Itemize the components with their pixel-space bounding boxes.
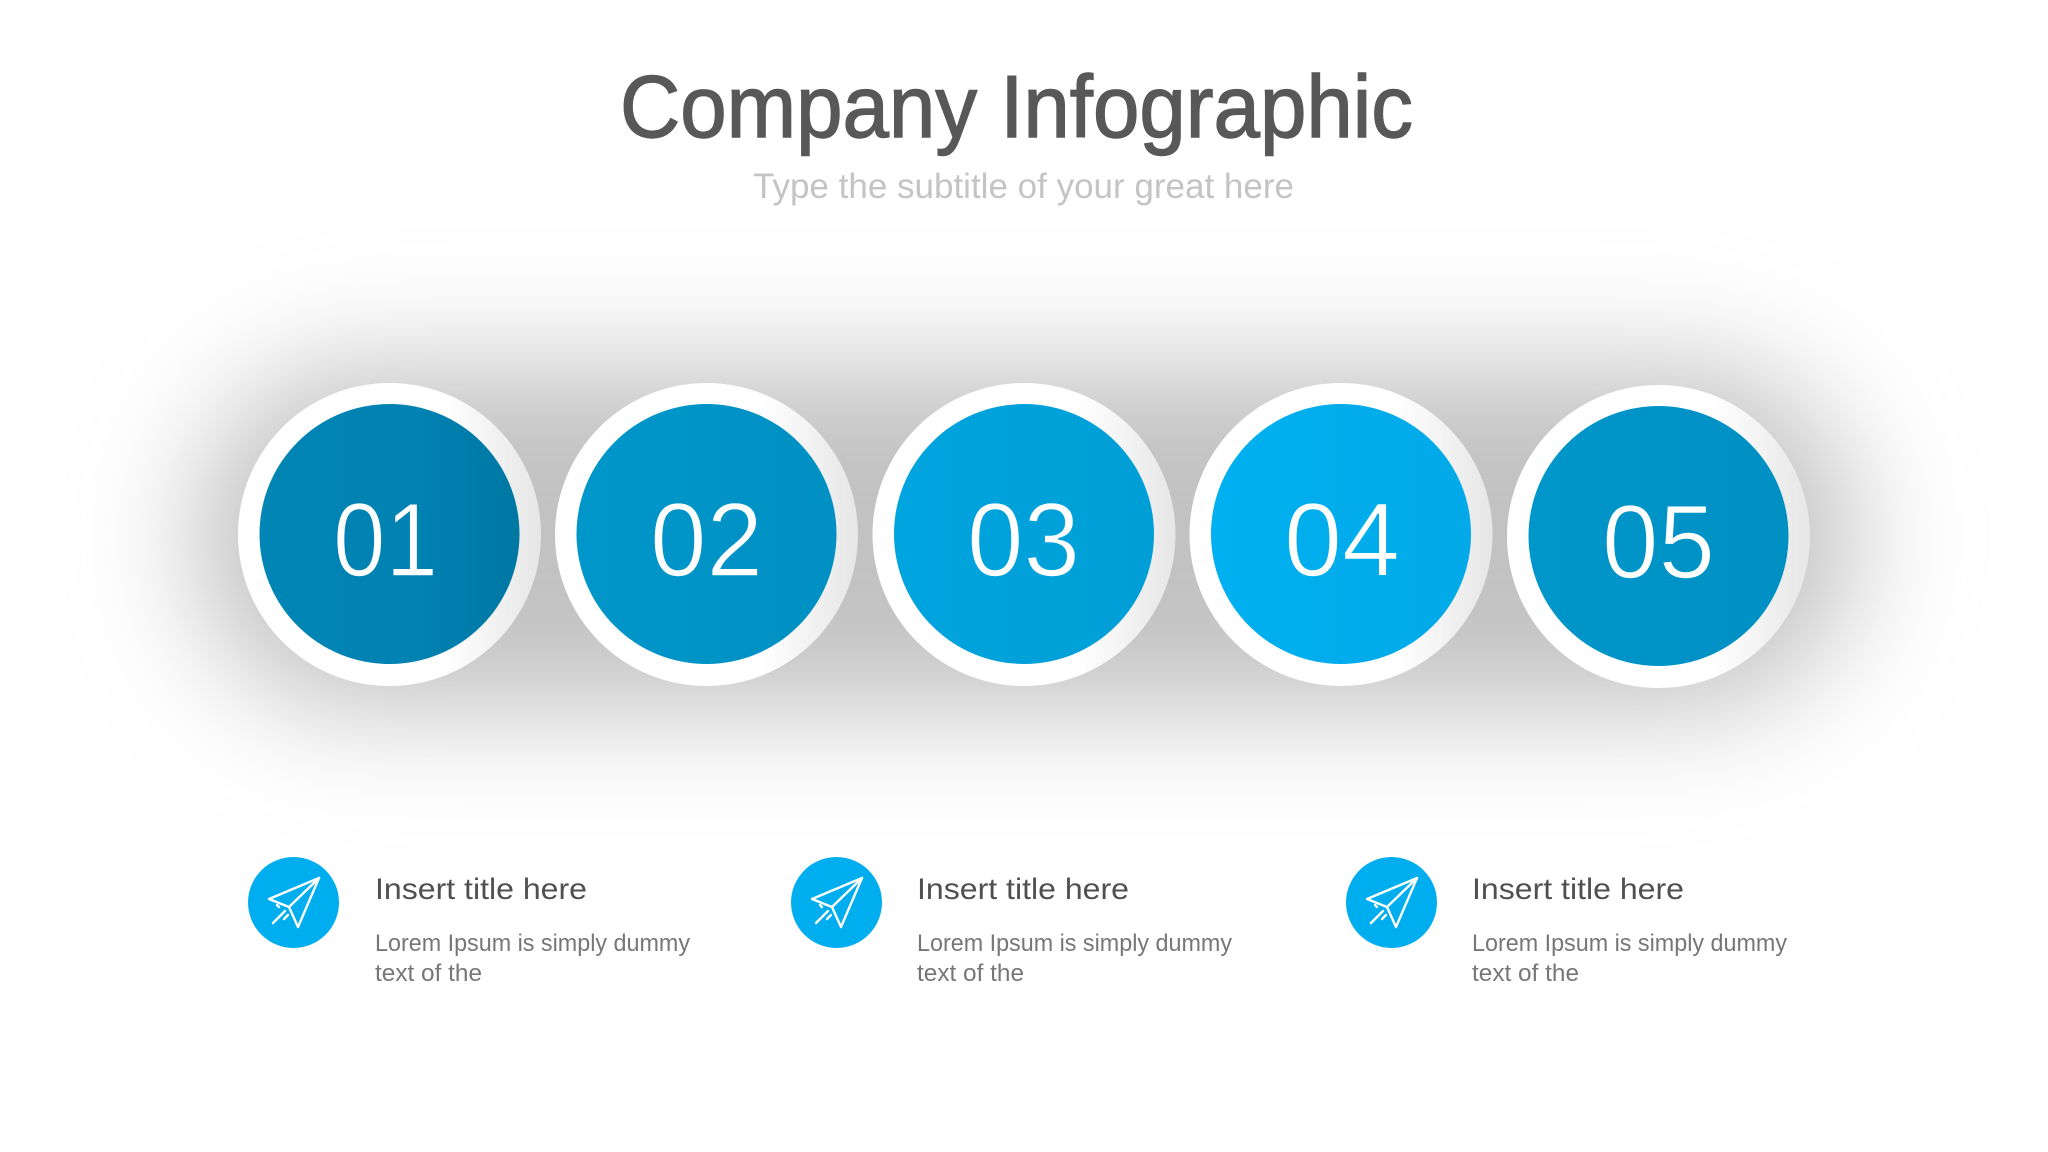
step 05: 05	[1602, 484, 1715, 601]
step 01	[238, 383, 541, 686]
step 03	[872, 383, 1176, 686]
step 04	[1190, 383, 1492, 686]
step 01: 01	[333, 482, 438, 599]
icon: paper plane 3	[1346, 857, 1437, 948]
item 3	[1346, 857, 1787, 987]
item 1 body: text of the	[375, 960, 482, 987]
background shadow	[195, 365, 1855, 710]
item 2 body	[917, 930, 1232, 987]
item 1 body	[375, 930, 690, 987]
item 3 heading: Insert title here	[1472, 873, 1684, 906]
subtitle: Type the subtitle of your great here	[753, 167, 1294, 206]
step 02	[555, 383, 858, 686]
item 2	[791, 857, 1232, 987]
item 3 body: text of the	[1472, 960, 1579, 987]
item 3 body: Lorem Ipsum is simply dummy	[1472, 930, 1787, 957]
item 2 body: text of the	[917, 960, 1024, 987]
step 02: 02	[650, 482, 763, 599]
item 3 body	[1472, 930, 1787, 987]
icon: paper plane 2	[791, 857, 882, 948]
item 2 body: Lorem Ipsum is simply dummy	[917, 930, 1232, 957]
item 1 body: Lorem Ipsum is simply dummy	[375, 930, 690, 957]
step 03: 03	[967, 482, 1080, 599]
step 04: 04	[1284, 482, 1400, 599]
step 05	[1507, 385, 1810, 688]
item 1	[248, 857, 690, 987]
icon: paper plane 1	[248, 857, 339, 948]
item 2 heading: Insert title here	[917, 873, 1129, 906]
item 1 heading: Insert title here	[375, 873, 587, 906]
title: Company Infographic	[620, 57, 1413, 156]
